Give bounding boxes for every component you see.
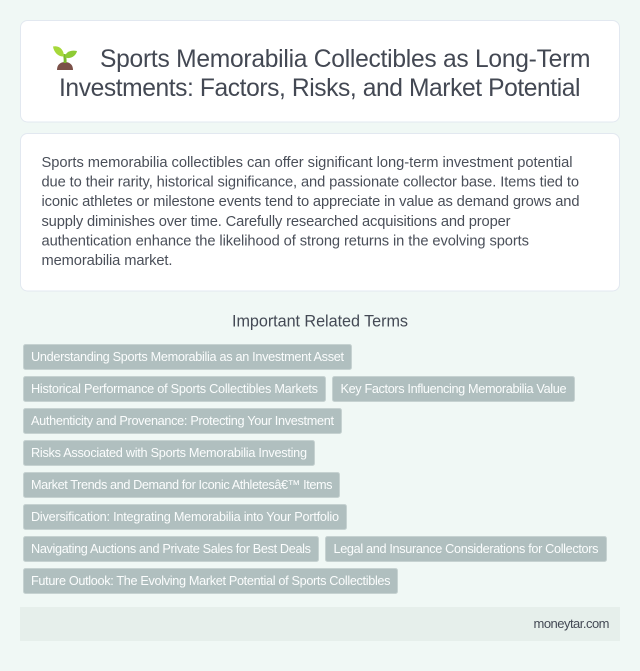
text block: summary: due to their rarity, historical significance, and passionate collector base. Items tied to: [42, 175, 579, 191]
tag: [24, 440, 314, 466]
tag: [24, 376, 326, 402]
title: [59, 46, 590, 102]
tag: Understanding Sports Memorabilia as an Investment Asset: [31, 350, 344, 364]
panel: title card: [20, 20, 620, 122]
text block: summary: [42, 155, 580, 269]
footer source text: moneytar.com: [534, 616, 610, 631]
tag: Market Trends and Demand for Iconic Athletesâ€™ Items: [31, 478, 332, 492]
tag: [24, 344, 352, 370]
title: Investments: Factors, Risks, and Market Potential: [59, 75, 580, 102]
tag: Risks Associated with Sports Memorabilia Investing: [31, 446, 307, 460]
text block: summary: supply diminishes over time. Carefully researched acquisitions and proper: [42, 214, 511, 230]
tag: [24, 536, 318, 562]
tag: [326, 536, 606, 562]
icon: seedling: [53, 46, 77, 70]
tag: [24, 504, 346, 530]
text block: summary: iconic athletes or milestone events tend to appreciate in value as demand grows and: [42, 194, 580, 210]
tag list: related terms: [24, 344, 606, 594]
text block: summary: memorabilia market.: [42, 253, 172, 269]
tag: [24, 472, 340, 498]
footer: [20, 607, 620, 641]
tag: Future Outlook: The Evolving Market Potential of Sports Collectibles: [31, 574, 390, 588]
tag: [24, 408, 342, 434]
text block: summary: authentication enhance the likelihood of strong returns in the evolving sports: [42, 233, 529, 249]
tag: Legal and Insurance Considerations for Collectors: [334, 542, 598, 556]
tag: Key Factors Influencing Memorabilia Value: [340, 382, 566, 396]
tag: Authenticity and Provenance: Protecting Your Investment: [31, 414, 334, 428]
tag: [332, 376, 574, 402]
heading: related terms: Important Related Terms: [232, 312, 408, 330]
tag: Historical Performance of Sports Collectibles Markets: [31, 382, 318, 396]
tag: Navigating Auctions and Private Sales for Best Deals: [31, 542, 311, 556]
tag: [24, 568, 398, 594]
tag: Diversification: Integrating Memorabilia into Your Portfolio: [31, 510, 339, 524]
title: Sports Memorabilia Collectibles as Long-Term: [100, 46, 590, 73]
panel: summary card: [20, 134, 620, 291]
text block: summary: Sports memorabilia collectibles can offer significant long-term investment potential: [42, 155, 572, 171]
